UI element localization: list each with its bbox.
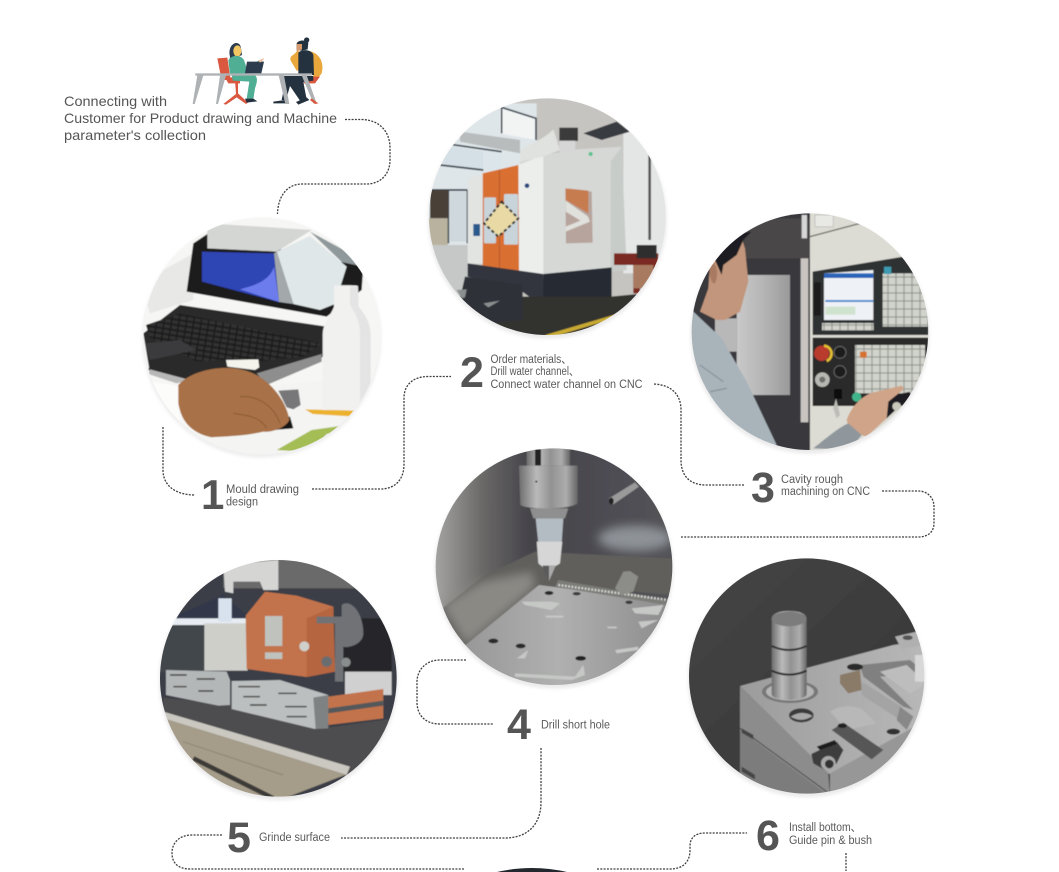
intro text: connecting with customer: Connecting with: [64, 93, 167, 109]
photo: drill bit over steel plate: [434, 448, 674, 689]
step text 2: Connect water channel on CNC: [490, 379, 642, 391]
intro text: connecting with customer: Customer for Product drawing and Machine: [64, 110, 337, 126]
panel: step 2 order materials and CNC: [428, 98, 667, 388]
step text 2: [490, 354, 642, 391]
step text 6: Install bottom、: [789, 822, 861, 834]
step text 2: Drill water channel、: [490, 366, 578, 378]
photo: laptop and hand on mouse: [142, 218, 381, 458]
panel: step 4 drill short hole: [434, 448, 674, 739]
intro text: connecting with customer: [64, 93, 337, 143]
intro text: connecting with customer: parameter's collection: [64, 127, 206, 143]
step number 1: 1: [201, 471, 224, 518]
panel: step 6 install bottom guide pin and bush: [688, 558, 926, 850]
step text 5: Grinde surface: [259, 832, 330, 844]
photo: guide pin on mould base: [688, 558, 926, 798]
step number 5: 5: [227, 814, 251, 862]
step number 6: 6: [756, 812, 780, 860]
step text 3: machining on CNC: [781, 486, 870, 498]
dotted flow connectors: [163, 120, 934, 871]
step text 6: Guide pin & bush: [789, 835, 872, 847]
step text 6: [789, 822, 872, 847]
step text 2: Order materials、: [490, 354, 572, 366]
step text 1: design: [226, 496, 258, 508]
step number 4: 4: [507, 701, 531, 749]
panel: step 5 grinde surface: [158, 560, 398, 852]
panel: step 3 cavity rough machining: [690, 213, 930, 502]
photo: next step circle cropped at page edge: [497, 868, 567, 872]
step text 1: [226, 484, 299, 508]
step number 2: 2: [460, 349, 484, 397]
photo: CNC machine in workshop: [428, 98, 667, 339]
step text 4: Drill short hole: [541, 720, 610, 732]
photo: operator at CNC control panel: [690, 213, 930, 454]
illustration: customer meeting at table: [193, 37, 323, 105]
step text 3: [781, 474, 870, 498]
step text 3: Cavity rough: [781, 474, 843, 486]
step text 1: Mould drawing: [226, 484, 299, 496]
step number 3: 3: [751, 464, 775, 512]
panel: step 1 mould drawing design: [142, 218, 381, 509]
photo: surface grinder with mould blocks: [158, 560, 398, 800]
